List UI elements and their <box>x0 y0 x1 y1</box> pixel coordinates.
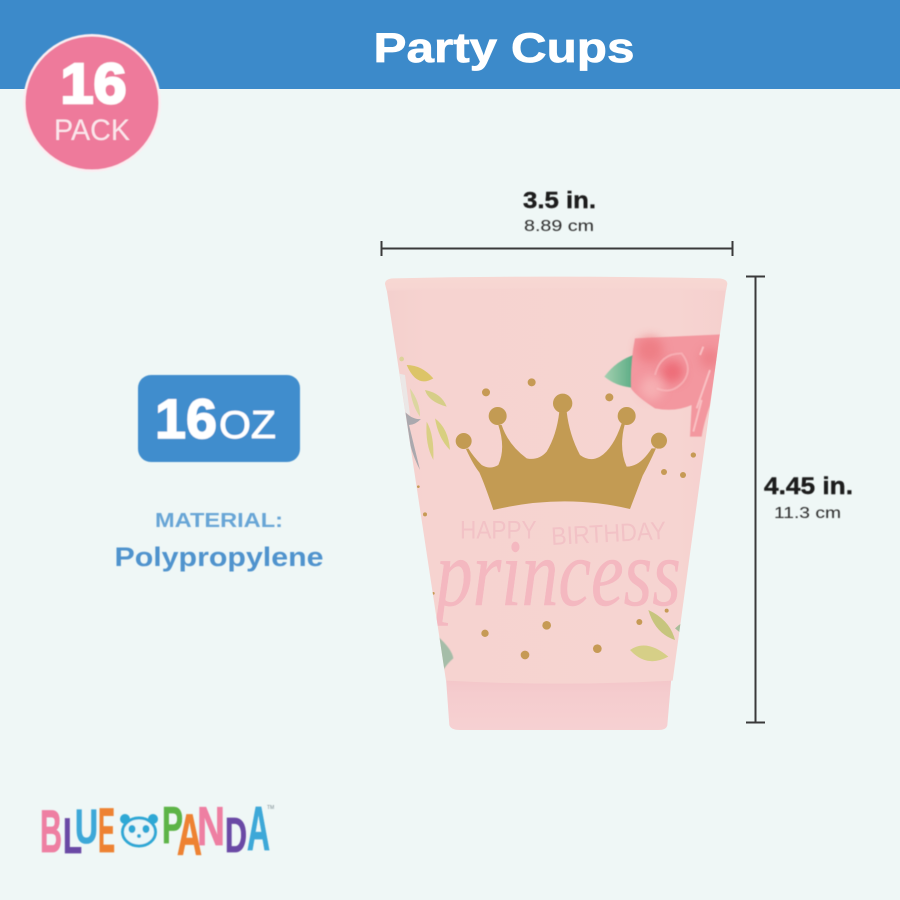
brand logo: Blue Panda: D <box>225 809 247 863</box>
green leaf <box>604 354 636 388</box>
happy birthday text: BIRTHDAY <box>551 517 667 551</box>
dimension: height: 11.3 cm <box>774 505 841 522</box>
brand logo: Blue Panda: U <box>75 801 98 854</box>
badge: 16 pack: 16 <box>60 52 126 116</box>
dimension: width: 8.89 cm <box>524 218 594 235</box>
icon: panda face <box>120 814 158 846</box>
brand logo: Blue Panda: A <box>247 795 270 864</box>
left foliage <box>398 357 450 470</box>
dimension: width <box>381 187 733 256</box>
capacity box: 16 oz: OZ <box>219 404 276 447</box>
bottom left leaf <box>440 638 454 670</box>
dimension: height: 4.45 in. <box>764 473 853 500</box>
bottom right leaves <box>630 610 680 662</box>
material text <box>114 510 324 572</box>
dimension: width: 3.5 in. <box>523 187 596 213</box>
brand logo: Blue Panda: A <box>177 803 202 868</box>
crown <box>456 394 667 510</box>
rose flower <box>604 334 722 437</box>
cup rim <box>385 277 727 291</box>
material text: Polypropylene <box>114 542 324 572</box>
badge: 16 pack <box>23 34 161 172</box>
capacity box: 16 oz: 16 <box>155 387 217 450</box>
brand logo: Blue Panda: P <box>162 797 183 855</box>
cup illustration <box>385 277 727 730</box>
princess script text: princess <box>431 520 681 626</box>
badge: 16 pack: PACK <box>54 114 130 147</box>
brand logo: Blue Panda <box>40 795 274 868</box>
brand logo: Blue Panda: E <box>98 796 115 866</box>
brand logo: Blue Panda: B <box>40 798 62 865</box>
material text: MATERIAL: <box>155 510 283 532</box>
dimension: height <box>746 276 853 723</box>
capacity box: 16 oz <box>138 375 300 462</box>
cup base <box>446 678 671 730</box>
cup body <box>386 285 727 684</box>
happy birthday text: HAPPY <box>460 516 537 544</box>
brand logo: Blue Panda: N <box>197 795 225 857</box>
title: Party Cups <box>374 24 634 71</box>
brand logo: Blue Panda: TM <box>267 805 274 811</box>
happy birthday text <box>462 521 665 545</box>
header banner <box>0 0 900 89</box>
gold dots <box>417 378 696 659</box>
brand logo: Blue Panda: L <box>63 808 82 864</box>
